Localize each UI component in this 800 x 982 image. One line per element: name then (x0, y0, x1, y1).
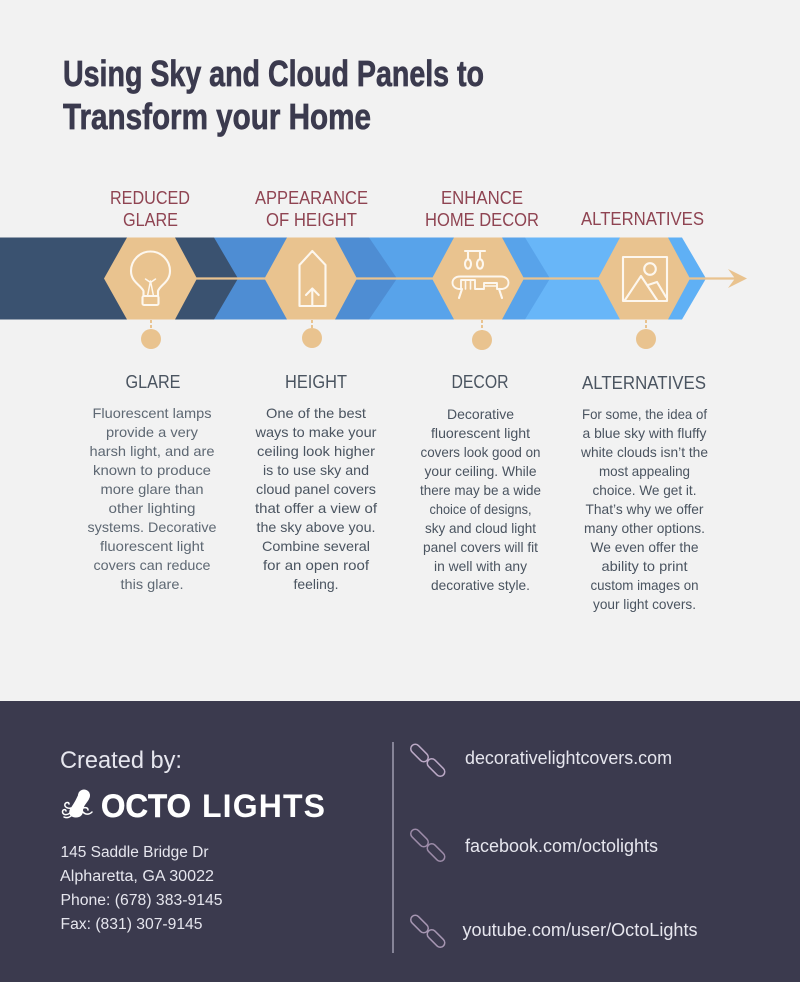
column: glare (88, 372, 217, 592)
title: Using Sky and Cloud Panels to (63, 53, 484, 94)
column: glare: fluorescent light (100, 538, 204, 554)
column: decor: in well with any (434, 558, 527, 574)
column: glare: Fluorescent lamps (92, 405, 212, 421)
column: alternatives: most appealing (599, 463, 690, 479)
footer divider (392, 742, 394, 953)
column: glare: provide a very (106, 424, 198, 440)
column: glare: more glare than (100, 481, 204, 497)
column: height: HEIGHT (285, 372, 347, 392)
icon: chain link youtube (409, 913, 447, 949)
column: alternatives: For some, the idea of (582, 406, 707, 422)
column: alternatives: custom images on (590, 577, 698, 593)
hexagon: decor (432, 238, 524, 320)
column: decor: decorative style. (431, 577, 530, 593)
website link: decorativelightcovers.com (465, 748, 672, 768)
icon: light bulb (131, 252, 170, 305)
column: glare: known to produce (93, 462, 211, 478)
column: alternatives: a blue sky with fluffy (582, 425, 706, 441)
top labels: REDUCED (110, 188, 190, 208)
column: height: is to use sky and (263, 462, 369, 478)
icon: octopus logo (62, 790, 92, 818)
timeline arrow (190, 269, 747, 288)
connector stems and dots (141, 320, 656, 350)
column: decor: there may be a wide (420, 482, 541, 498)
column: height: the sky above you. (256, 519, 376, 535)
top labels (110, 188, 704, 230)
column: glare: other lighting (108, 500, 196, 516)
address block: Phone: (678) 383-9145 (60, 892, 222, 909)
title (63, 53, 484, 137)
column: decor: sky and cloud light (425, 520, 536, 536)
column: glare: systems. Decorative (88, 519, 217, 535)
column: alternatives (580, 373, 708, 612)
column: decor: DECOR (452, 372, 508, 392)
address block: Fax: (831) 307-9145 (60, 916, 202, 933)
hexagon: glare (104, 238, 197, 320)
column: decor: fluorescent light (431, 425, 530, 441)
column: height: One of the best (266, 405, 366, 421)
top labels: GLARE (123, 210, 178, 230)
column: height: for an open roof (263, 557, 369, 573)
logo wordmark: OCTO (101, 788, 191, 824)
icon: picture frame (623, 257, 667, 301)
logo wordmark: LIGHTS (202, 788, 325, 824)
column: height: that offer a view of (255, 500, 377, 516)
created by heading: Created by: (60, 747, 182, 774)
icon: house with up arrow (300, 251, 326, 306)
icon: furniture and lamps (452, 251, 508, 298)
column: decor: Decorative (447, 406, 514, 422)
column: alternatives: your light covers. (593, 596, 696, 612)
column: height: cloud panel covers (256, 481, 376, 497)
column: decor: panel covers will fit (423, 539, 538, 555)
top labels: ALTERNATIVES (581, 209, 704, 229)
youtube link: youtube.com/user/OctoLights (462, 920, 698, 940)
footer panel (0, 701, 800, 982)
icon: chain link facebook (409, 827, 447, 863)
column: glare: covers can reduce (94, 557, 211, 573)
column: height: ways to make your (254, 424, 377, 440)
column: glare: harsh light, and are (90, 443, 215, 459)
column: decor (420, 372, 541, 593)
address block: Alpharetta, GA 30022 (60, 868, 214, 885)
column: height: ceiling look higher (257, 443, 375, 459)
icon: chain link website (409, 742, 447, 778)
column: decor: choice of designs, (430, 501, 532, 517)
top labels: OF HEIGHT (266, 210, 357, 230)
column: height: feeling. (294, 576, 338, 592)
column: glare: GLARE (126, 372, 180, 392)
column: height: Combine several (262, 538, 370, 554)
facebook link: facebook.com/octolights (465, 836, 658, 856)
top labels: APPEARANCE (255, 188, 368, 208)
column: decor: covers look good on (420, 444, 540, 460)
logo wordmark (101, 788, 325, 824)
column: alternatives: many other options. (584, 520, 705, 536)
column: alternatives: We even offer the (590, 539, 699, 555)
title: Transform your Home (63, 96, 371, 137)
address block (60, 844, 222, 933)
column: alternatives: choice. We get it. (592, 482, 696, 498)
timeline band with chevrons (0, 238, 706, 320)
column: alternatives: white clouds isn’t the (580, 444, 708, 460)
top labels: HOME DECOR (425, 210, 539, 230)
column: alternatives: ALTERNATIVES (582, 373, 706, 393)
top labels: ENHANCE (441, 188, 523, 208)
hexagon: height (264, 238, 357, 320)
column: alternatives: That’s why we offer (586, 501, 704, 517)
address block: 145 Saddle Bridge Dr (60, 844, 208, 861)
hexagon: alternatives (598, 238, 690, 320)
column: alternatives: ability to print (602, 558, 688, 574)
column: decor: your ceiling. While (424, 463, 537, 479)
column: glare: this glare. (120, 576, 184, 592)
column: height (254, 372, 377, 592)
